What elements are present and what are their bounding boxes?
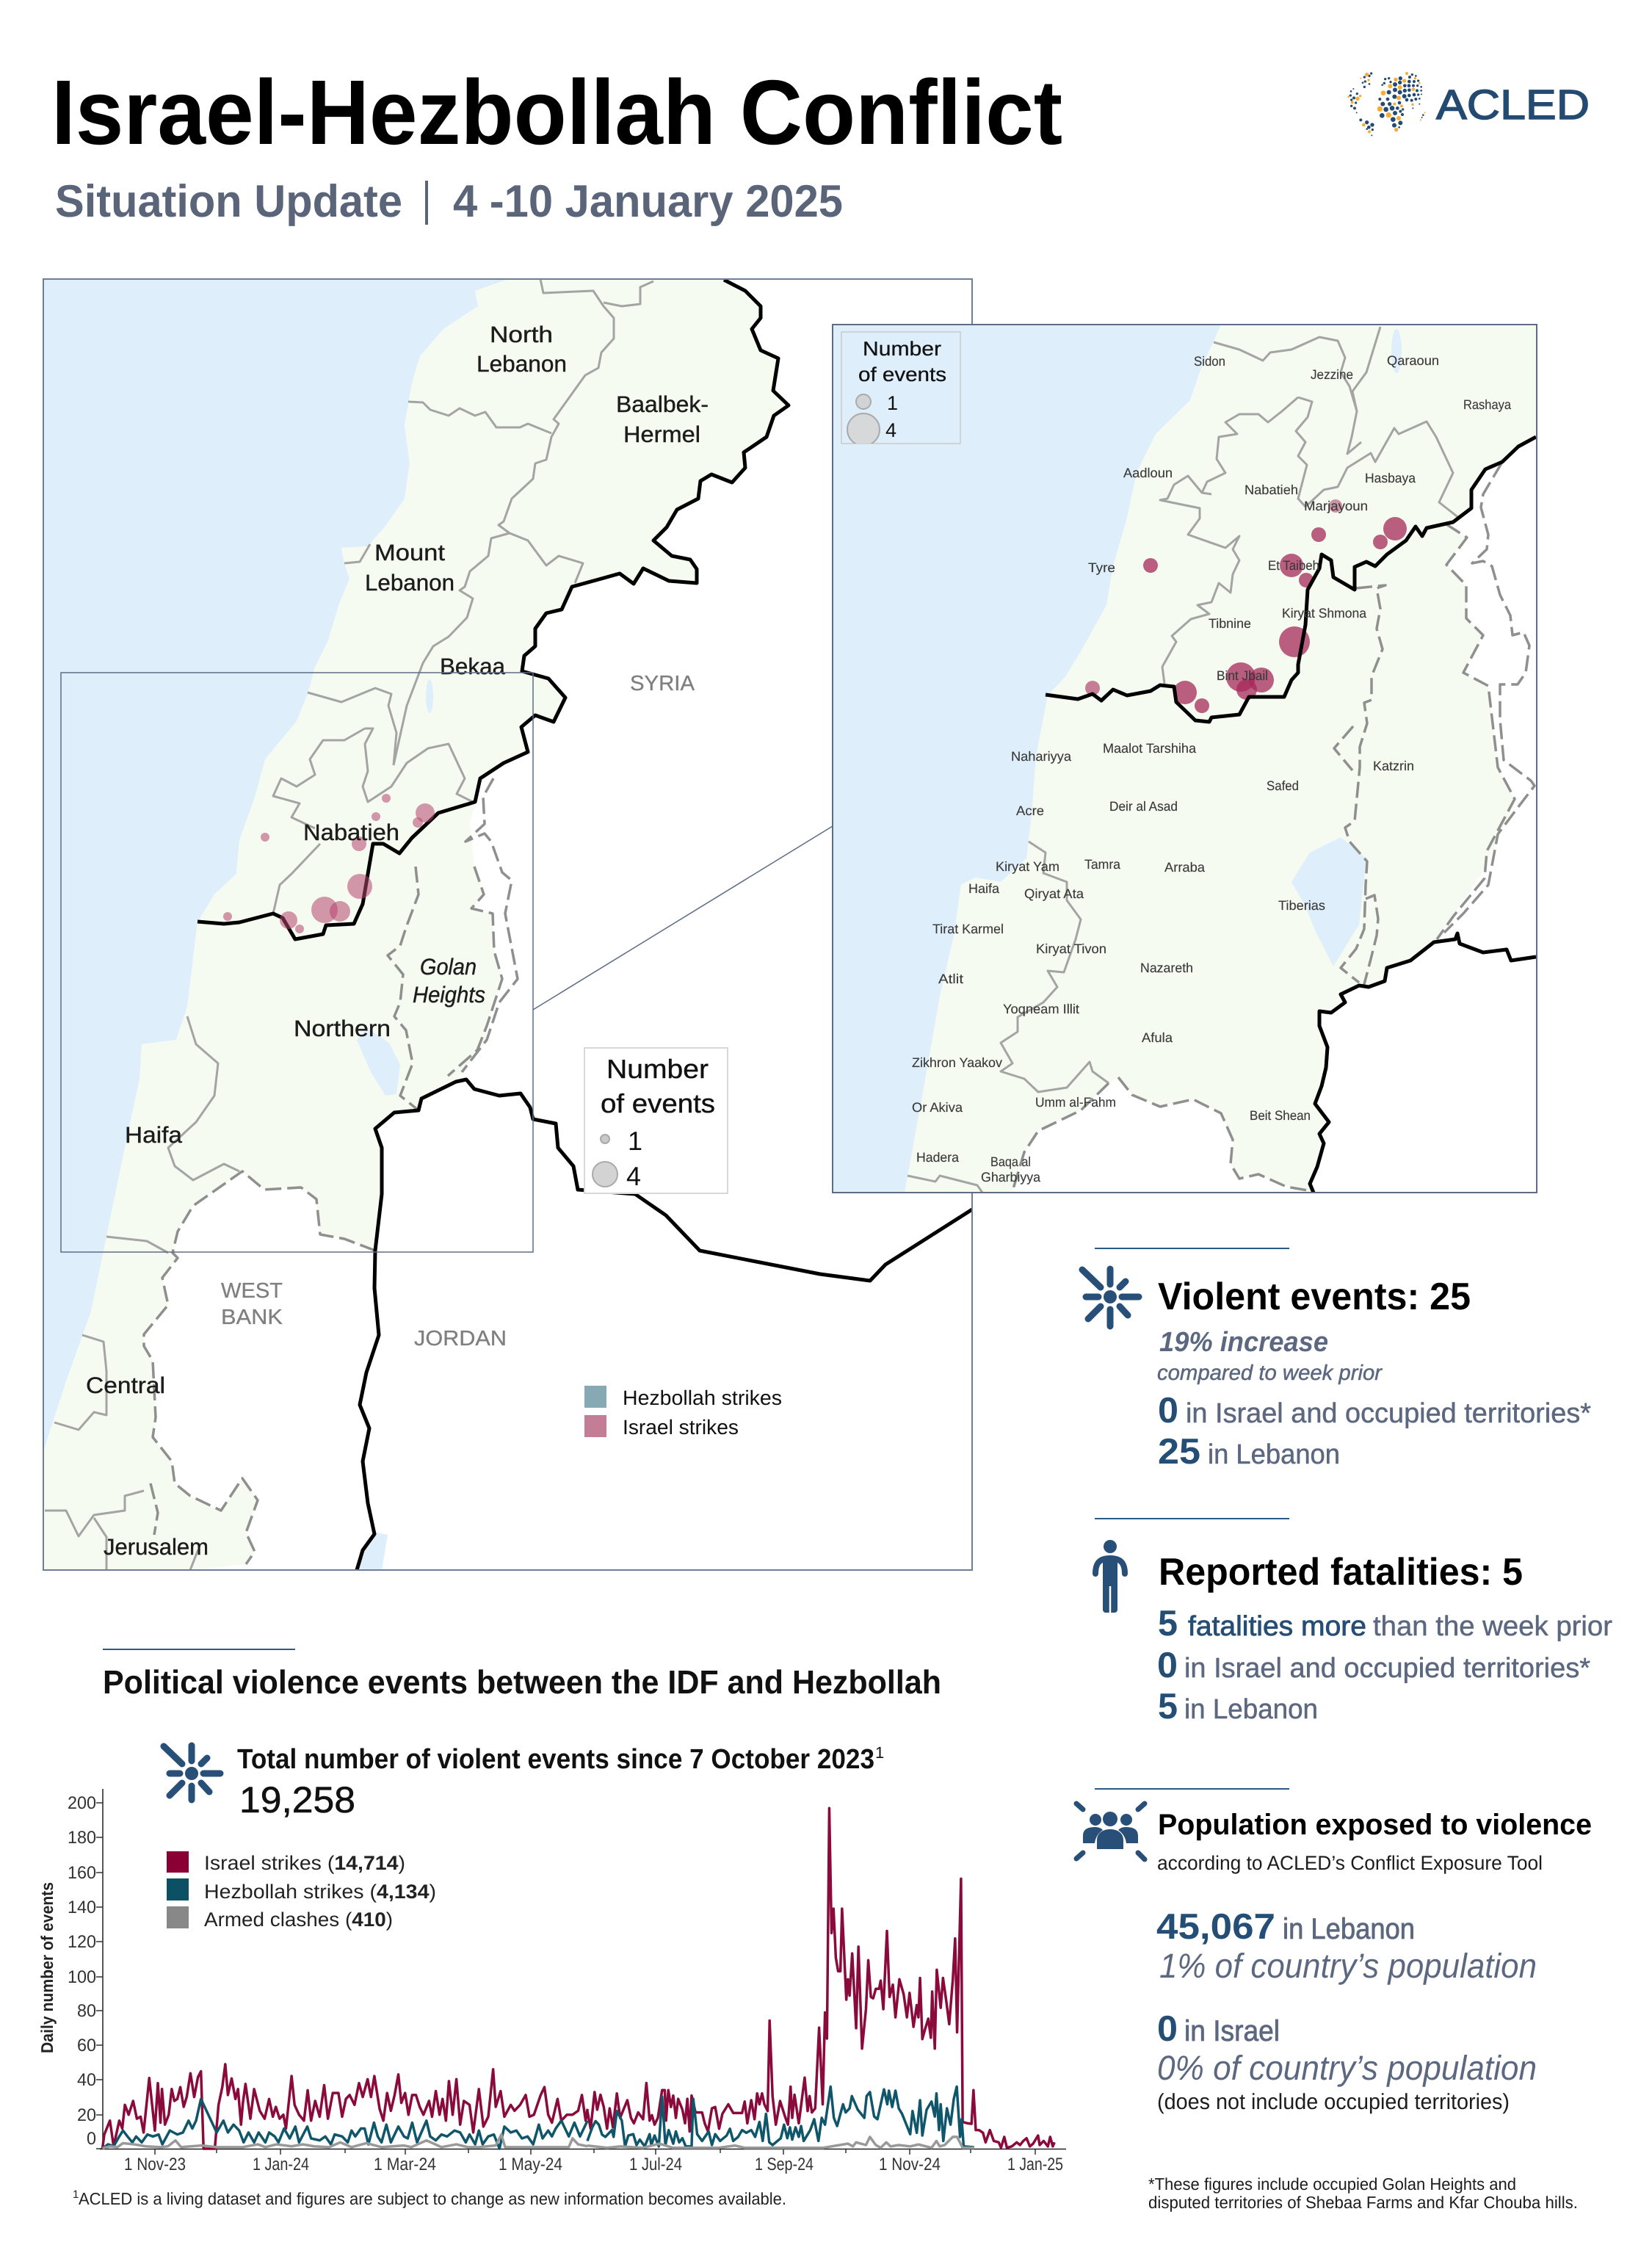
total events text: Total number of violent events since 7 October 2023	[237, 1744, 874, 1775]
region labels: SYRIA	[630, 672, 695, 695]
inset place labels: Aadloun	[1123, 466, 1173, 480]
title: Israel-Hezbollah Conflict	[51, 62, 1062, 164]
inset place labels: Deir al Asad	[1109, 799, 1178, 814]
inset place labels: Kiryat Shmona	[1282, 606, 1367, 621]
region labels: JORDAN	[414, 1327, 507, 1350]
chart footnote: ACLED is a living dataset and figures are subject to change as new information becomes available.	[79, 2189, 786, 2208]
region labels: Lebanon	[365, 570, 454, 596]
panel: violent events: in Lebanon	[1208, 1439, 1340, 1470]
panel: population exposed: Population exposed to violence	[1158, 1809, 1592, 1841]
y axis	[37, 1789, 103, 2149]
inset place labels: Jezzine	[1311, 367, 1353, 382]
region labels: Golan	[420, 954, 477, 980]
inset place labels: Nahariyya	[1011, 749, 1072, 764]
chart legend: Hezbollah strikes ( 4,134)	[204, 1881, 436, 1903]
panel: reported fatalities: 5	[1158, 1687, 1178, 1726]
panel: reported fatalities: fatalities more	[1188, 1611, 1366, 1642]
inset place labels: Beit Shean	[1250, 1108, 1311, 1123]
inset place labels: Or Akiva	[912, 1100, 963, 1115]
panel: population exposed: 0	[1157, 2009, 1178, 2049]
panel: inset map	[833, 325, 1537, 1193]
panel: reported fatalities: 5	[1158, 1604, 1178, 1643]
inset place labels: Haifa	[968, 881, 1000, 896]
inset place labels: Tiberias	[1278, 898, 1325, 913]
panel: violent events: compared to week prior	[1157, 1361, 1383, 1385]
inset place labels: Maalot Tarshiha	[1103, 741, 1197, 756]
inset place labels: Tibnine	[1209, 616, 1251, 631]
chart legend: Israel strikes ( 14,714)	[204, 1852, 405, 1874]
panel: violent events	[1082, 1248, 1591, 1472]
inset place labels: Yoqneam Illit	[1003, 1002, 1079, 1016]
footnote: occupied territories: *These figures include occupied Golan Heights and	[1148, 2174, 1516, 2194]
x axis: 1 Jul-24	[629, 2155, 682, 2174]
admin boundaries	[45, 279, 653, 1570]
inset place labels: Tamra	[1084, 857, 1121, 872]
x axis: 1 Sep-24	[755, 2155, 814, 2174]
connector line to inset	[533, 826, 833, 1010]
Israel / Lebanon / Jordan borders	[198, 280, 972, 1570]
inset place labels: Hadera	[916, 1150, 960, 1165]
x axis: 1 Jan-24	[253, 2155, 309, 2174]
y axis: 120	[68, 1932, 96, 1952]
subtitle: 4 -10 January 2025	[453, 176, 843, 227]
panel: violent events: Violent events: 25	[1158, 1276, 1471, 1318]
main map colour legend	[584, 1386, 782, 1439]
inset place labels: Kiryat Yam	[996, 859, 1059, 874]
y axis: 0	[87, 2129, 96, 2149]
inset place labels: Tyre	[1088, 560, 1115, 575]
region labels: Haifa	[125, 1122, 183, 1148]
inset place labels: Baqa al	[990, 1154, 1031, 1169]
footnote: occupied territories: disputed territories of Shebaa Farms and Kfar Chouba hills.	[1148, 2193, 1578, 2212]
main map size legend: of events	[601, 1088, 715, 1118]
strike bubbles	[223, 794, 435, 933]
chart footnote: 1	[73, 2188, 79, 2201]
region labels: Baalbek-	[616, 391, 709, 417]
region labels: WEST	[221, 1279, 283, 1303]
inset admin boundaries	[907, 327, 1460, 1193]
y axis: 180	[68, 1828, 96, 1848]
chart legend	[167, 1851, 436, 1931]
panel: population exposed: 1% of country’s population	[1159, 1946, 1537, 1985]
panel: reported fatalities: Reported fatalities: 5	[1159, 1551, 1523, 1594]
inset place labels: Hasbaya	[1365, 471, 1416, 485]
inset place labels: Arraba	[1164, 860, 1206, 875]
land	[43, 279, 789, 1570]
main map size legend	[584, 1048, 728, 1193]
y axis: 40	[77, 2070, 96, 2090]
panel: population exposed: 45,067	[1156, 1907, 1275, 1947]
panel: reported fatalities: in Israel and occupied territories*	[1184, 1653, 1590, 1684]
panel: reported fatalities: than the week prior	[1373, 1611, 1612, 1642]
region labels: Hermel	[623, 422, 700, 447]
line chart: Hezbollah strikes	[102, 2086, 974, 2149]
panel: violent events: 19% increase	[1159, 1327, 1328, 1358]
panel: reported fatalities: 0	[1157, 1646, 1178, 1685]
x axis: 1 Nov-24	[879, 2155, 941, 2174]
inset place labels: Et Taibeh	[1268, 558, 1319, 573]
inset size legend	[841, 332, 960, 446]
panel: population exposed: in Israel	[1184, 2015, 1280, 2047]
inset place labels: Afula	[1142, 1030, 1173, 1045]
x axis: 1 Mar-24	[374, 2155, 436, 2174]
panel: population exposed: 0% of country’s population	[1157, 2048, 1537, 2087]
y axis: 200	[68, 1793, 96, 1813]
inset place labels: Gharbiyya	[981, 1170, 1041, 1185]
icon: exposed people	[1076, 1804, 1145, 1859]
inset borders	[1046, 437, 1536, 1193]
inset size legend: Number	[863, 338, 941, 360]
y axis: 140	[68, 1898, 96, 1917]
total events text	[237, 1743, 884, 1820]
inset place labels	[912, 353, 1512, 1185]
main map colour legend: Israel strikes	[623, 1416, 739, 1439]
inset place labels: Katzrin	[1373, 759, 1414, 773]
inset locator rectangle	[61, 673, 533, 1252]
panel: population exposed	[1076, 1789, 1592, 2114]
y axis: 80	[77, 2001, 96, 2021]
icon: total events starburst	[164, 1746, 220, 1800]
region labels: Jerusalem	[104, 1534, 209, 1560]
inset size legend: of events	[858, 364, 946, 386]
region labels: Nabatieh	[303, 820, 399, 845]
main map size legend: Number	[606, 1054, 709, 1084]
inset place labels: Qiryat Ata	[1024, 886, 1084, 901]
inset dashed boundaries	[1012, 463, 1535, 1191]
main map size legend: 4	[626, 1161, 641, 1191]
icon: person	[1095, 1540, 1125, 1613]
panel: main map	[43, 279, 972, 1570]
main map colour legend: Hezbollah strikes	[623, 1386, 782, 1409]
region labels: Lebanon	[477, 351, 567, 377]
footnote: occupied territories	[1148, 2174, 1578, 2212]
inset place labels: Umm al-Fahm	[1035, 1095, 1116, 1110]
panel: violent events: 25	[1158, 1432, 1200, 1472]
ACLED logo: ACLED	[1436, 82, 1590, 129]
icon: violence starburst	[1082, 1269, 1139, 1326]
panel: population exposed: (does not include occupied territories)	[1157, 2090, 1510, 2114]
inset lakes	[1291, 329, 1402, 966]
dashed boundaries	[144, 778, 518, 1564]
panel: reported fatalities	[1095, 1519, 1612, 1726]
panel: political violence chart	[37, 1649, 1066, 2208]
line chart: armed clashes	[102, 2135, 974, 2148]
x axis: 1 May-24	[499, 2155, 562, 2174]
region labels: Mount	[374, 540, 445, 565]
region labels: North	[490, 322, 553, 347]
chart heading: Political violence events between the IDF and Hezbollah	[103, 1663, 941, 1701]
inset place labels: Marjayoun	[1304, 499, 1368, 513]
inset place labels: Sidon	[1194, 354, 1225, 369]
inset size legend: 1	[887, 392, 898, 414]
inset place labels: Rashaya	[1463, 397, 1512, 412]
region labels	[86, 322, 709, 1560]
y axis: 60	[77, 2036, 96, 2055]
region labels: BANK	[221, 1306, 283, 1329]
inset place labels: Acre	[1016, 803, 1044, 818]
inset place labels: Atlit	[938, 972, 963, 986]
inset place labels: Kiryat Tivon	[1036, 941, 1106, 956]
panel: violent events: 0	[1158, 1391, 1178, 1431]
inset place labels: Qaraoun	[1387, 353, 1439, 368]
x axis	[100, 2149, 1066, 2174]
region labels: Northern	[294, 1016, 391, 1041]
inset place labels: Nabatieh	[1245, 482, 1298, 497]
x axis: 1 Nov-23	[124, 2155, 186, 2174]
inset size legend: 4	[885, 419, 896, 441]
y axis: Daily number of events	[37, 1882, 57, 2053]
chart legend: Armed clashes (410)	[204, 1909, 393, 1931]
panel: violent events: in Israel and occupied territories*	[1186, 1398, 1591, 1429]
sea	[43, 279, 509, 1452]
region labels: Bekaa	[440, 654, 506, 679]
y axis: 160	[68, 1863, 96, 1883]
inset strike bubbles	[1085, 499, 1407, 713]
inset place labels: Safed	[1267, 778, 1299, 793]
subtitle: Situation Update	[55, 176, 402, 227]
panel: reported fatalities: in Lebanon	[1184, 1694, 1318, 1725]
ACLED logo	[1347, 72, 1590, 136]
inset place labels: Nazareth	[1140, 961, 1193, 975]
region labels: Heights	[413, 982, 485, 1008]
y axis: 100	[68, 1967, 96, 1987]
inset land	[905, 325, 1537, 1193]
y axis: 20	[77, 2105, 96, 2125]
inset place labels: Zikhron Yaakov	[912, 1055, 1002, 1070]
panel: population exposed: in Lebanon	[1283, 1913, 1415, 1945]
inset place labels: Bint Jbail	[1217, 668, 1268, 683]
subtitle	[55, 176, 843, 227]
lakes	[354, 679, 433, 1570]
inset place labels: Tirat Karmel	[932, 922, 1004, 936]
line chart: Israel strikes	[102, 1808, 1054, 2149]
total events text: 1	[875, 1743, 884, 1762]
total events text: 19,258	[239, 1779, 355, 1820]
x axis: 1 Jan-25	[1007, 2155, 1063, 2174]
region labels: Central	[86, 1372, 165, 1398]
panel: population exposed: according to ACLED’s Conflict Exposure Tool	[1157, 1852, 1543, 1874]
main map size legend: 1	[628, 1126, 642, 1156]
inset sea	[833, 325, 1221, 1193]
